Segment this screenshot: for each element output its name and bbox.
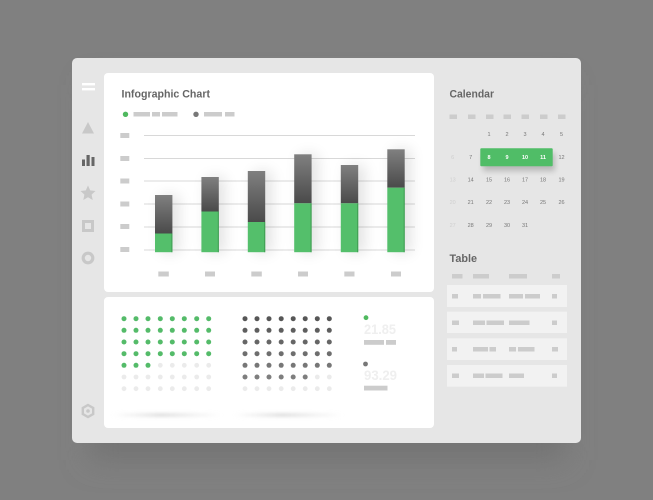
calendar dates: 18 (540, 178, 546, 184)
stat: 93.29: 93.29 (364, 367, 397, 383)
calendar dates: 6 (451, 155, 454, 161)
weekday labels (450, 114, 566, 119)
bar 5 (341, 165, 358, 252)
bar 2 (201, 177, 219, 252)
sidebar icons (80, 83, 96, 417)
legend (123, 112, 234, 117)
table row 4 (447, 365, 567, 387)
table row 2 (447, 312, 567, 333)
calendar dates: 26 (558, 200, 565, 206)
calendar dates: 4 (541, 132, 545, 138)
calendar dates: 14 (468, 178, 474, 184)
table row 3 (447, 338, 567, 360)
calendar dates (450, 132, 565, 229)
panel: bar chart (104, 73, 434, 292)
calendar dates: 25 (540, 200, 546, 206)
panel: main dashboard card (72, 58, 581, 443)
dot matrix: green (122, 316, 211, 391)
bar 4 (294, 154, 312, 252)
icon: star (80, 186, 96, 200)
calendar dates: 28 (468, 223, 474, 229)
icon: triangle (82, 122, 94, 134)
icon: circle (83, 253, 93, 263)
heading: Table: Table (450, 253, 477, 265)
calendar dates: 22 (486, 200, 492, 206)
table header (452, 274, 560, 278)
calendar dates: 30 (504, 223, 510, 229)
calendar dates: 8 (487, 155, 491, 161)
icon: settings (83, 405, 93, 417)
stat: 21.85: 21.85 (364, 321, 396, 337)
bar 6 (387, 149, 405, 252)
panel: table (447, 253, 567, 387)
calendar dates: 17 (522, 178, 528, 184)
selected date range (480, 148, 553, 166)
calendar dates: 15 (486, 178, 492, 184)
bar 1 (155, 195, 172, 252)
calendar dates: 9 (505, 155, 509, 161)
calendar dates: 7 (469, 155, 472, 161)
stat: 21.85 (364, 315, 396, 345)
dot matrix: grey (242, 316, 332, 391)
selected range shadow (483, 153, 555, 171)
calendar dates: 29 (486, 223, 492, 229)
calendar dates: 1 (487, 132, 491, 138)
panel: dot matrices and stats (104, 297, 434, 428)
gridlines (144, 136, 415, 250)
icon: menu (82, 83, 95, 90)
y-axis labels (120, 133, 129, 252)
calendar dates: 19 (558, 178, 565, 184)
stat: 93.29 (363, 362, 397, 390)
calendar dates: 31 (522, 223, 528, 229)
bar shadows (160, 149, 411, 253)
calendar dates: 5 (560, 132, 563, 138)
calendar dates: 23 (504, 200, 510, 206)
table row 1 (447, 285, 567, 307)
bar 3 (248, 171, 265, 252)
calendar dates: 21 (468, 200, 474, 206)
calendar dates: 11 (540, 155, 546, 161)
calendar dates: 16 (504, 178, 510, 184)
icon: square (82, 220, 94, 232)
calendar dates: 3 (523, 132, 527, 138)
heading: Infographic Chart: Infographic Chart (122, 88, 210, 100)
x-axis labels (158, 272, 401, 276)
calendar dates: 12 (558, 155, 565, 161)
calendar dates: 20 (450, 200, 456, 206)
heading: Calendar: Calendar (450, 88, 495, 100)
calendar dates: 10 (522, 155, 528, 161)
icon: bar chart (82, 155, 94, 166)
calendar dates: 24 (522, 200, 528, 206)
calendar dates: 27 (450, 223, 456, 229)
calendar dates: 2 (505, 132, 509, 138)
panel: calendar (450, 88, 566, 229)
matrix ground shadows (112, 414, 343, 416)
calendar dates: 13 (450, 178, 456, 184)
